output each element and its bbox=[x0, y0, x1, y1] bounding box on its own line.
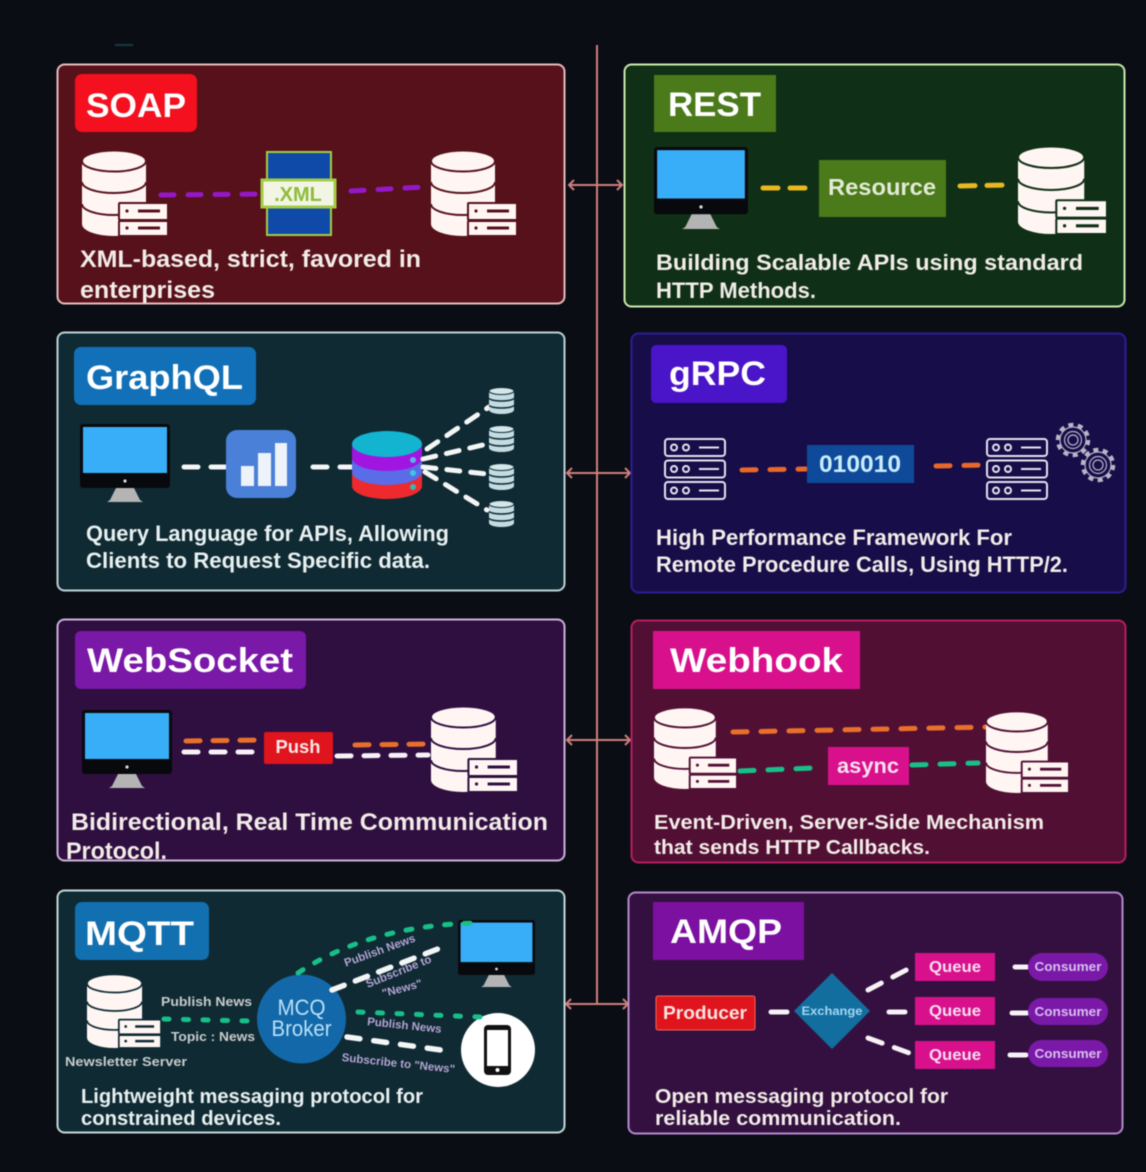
icon: gears bbox=[1058, 425, 1113, 480]
description: WebSocket: Bidirectional, Real Time Communication bbox=[71, 809, 548, 836]
icon: left server bbox=[665, 439, 725, 499]
rotated link labels: Publish News bbox=[367, 1016, 442, 1036]
icon: left database bbox=[654, 707, 737, 789]
description: REST: HTTP Methods. bbox=[656, 278, 816, 303]
icon: newsletter server database bbox=[87, 974, 161, 1048]
binary payload box: 010010 bbox=[819, 451, 901, 478]
description: gRPC: Remote Procedure Calls, Using HTTP/2. bbox=[656, 552, 1068, 577]
rotated link labels: Publish News bbox=[343, 933, 417, 970]
dashed link: left bbox=[161, 194, 262, 195]
dashed link: subscribe from phone bbox=[347, 1037, 448, 1051]
description: SOAP: enterprises bbox=[80, 277, 215, 304]
icon: small databases bbox=[489, 388, 514, 527]
queue boxes bbox=[915, 953, 995, 1069]
dashed link: green left bbox=[740, 768, 813, 771]
panel: gRPC bbox=[632, 334, 1126, 592]
panel: WebSocket bbox=[58, 620, 564, 865]
async box bbox=[828, 747, 909, 785]
description: GraphQL: Query Language for APIs, Allowing bbox=[86, 521, 449, 546]
arrow: GraphQL to gRPC bbox=[567, 468, 630, 478]
binary payload box bbox=[807, 445, 914, 483]
queue boxes: Queue bbox=[929, 959, 981, 976]
panel: SOAP bbox=[58, 64, 564, 304]
description: MQTT: Lightweight messaging protocol for bbox=[81, 1086, 423, 1108]
arrow: WebSocket to Webhook bbox=[567, 735, 630, 745]
description: MQTT bbox=[81, 1086, 423, 1130]
icon: monitor bbox=[654, 147, 748, 229]
description: REST bbox=[656, 250, 1083, 303]
rotated link labels: Subscribe to bbox=[364, 954, 433, 991]
dashed link: producer to exchange bbox=[771, 1010, 787, 1014]
heading: SOAP bbox=[75, 74, 197, 132]
icon: XML document bbox=[262, 152, 335, 235]
heading: MQTT bbox=[75, 902, 209, 960]
push box bbox=[264, 732, 333, 764]
broker circle: MCQ bbox=[278, 995, 326, 1020]
heading: gRPC: gRPC bbox=[669, 355, 766, 393]
async box: async bbox=[837, 755, 899, 778]
dashed link: publish to phone bbox=[358, 1012, 480, 1017]
icon: XML document: .XML bbox=[274, 184, 322, 206]
queue boxes: Queue bbox=[929, 1047, 981, 1064]
heading: MQTT: MQTT bbox=[85, 915, 194, 953]
dashed link: right bbox=[351, 187, 424, 191]
icon: monitor bbox=[82, 710, 172, 788]
icon: phone bbox=[461, 1013, 535, 1087]
resource box bbox=[819, 160, 946, 217]
resource box: Resource bbox=[828, 174, 936, 200]
description: AMQP: Open messaging protocol for bbox=[655, 1086, 948, 1108]
rotated link labels: Subscribe to "News" bbox=[341, 1052, 456, 1076]
arrow: SOAP to REST bbox=[569, 180, 622, 190]
heading: REST: REST bbox=[668, 86, 761, 124]
panel: AMQP bbox=[628, 892, 1122, 1134]
dashed links: right bbox=[337, 744, 428, 756]
description: Webhook: Event-Driven, Server-Side Mechanism bbox=[654, 811, 1044, 834]
rotated link labels: "News" bbox=[381, 978, 424, 1000]
description: GraphQL bbox=[86, 521, 449, 573]
icon: database bbox=[431, 706, 518, 792]
push box: Push bbox=[276, 737, 320, 757]
small teal mark at top bbox=[115, 44, 133, 46]
dashed link: right bbox=[960, 185, 1005, 186]
heading: Webhook bbox=[653, 631, 860, 689]
icon: layered database bbox=[352, 431, 422, 499]
description: MQTT: constrained devices. bbox=[81, 1108, 281, 1130]
dashed links: left bbox=[184, 740, 262, 752]
heading: AMQP: AMQP bbox=[670, 913, 782, 951]
heading: WebSocket: WebSocket bbox=[87, 642, 293, 680]
heading: REST bbox=[654, 75, 776, 132]
dashed link: chart to stack bbox=[313, 464, 355, 470]
dashed link: orange callback bbox=[733, 727, 988, 732]
panel: MQTT bbox=[58, 890, 564, 1132]
dashed link: publish to monitor bbox=[298, 923, 478, 973]
dashed link: green right bbox=[912, 763, 978, 765]
labels: server side: Newsletter Server bbox=[65, 1054, 187, 1069]
panel: Webhook bbox=[632, 620, 1126, 862]
icon: right database bbox=[986, 711, 1069, 793]
panel: GraphQL bbox=[58, 332, 564, 590]
dashed link: right bbox=[936, 465, 982, 466]
panel: REST bbox=[624, 64, 1124, 306]
producer box bbox=[656, 996, 755, 1030]
description: GraphQL: Clients to Request Specific data. bbox=[86, 548, 430, 573]
description: gRPC: High Performance Framework For bbox=[656, 525, 1012, 550]
heading: WebSocket bbox=[75, 631, 306, 689]
queue boxes: Queue bbox=[929, 1003, 981, 1020]
arrow: MQTT to AMQP bbox=[566, 999, 628, 1009]
heading: GraphQL bbox=[74, 347, 256, 405]
dashed link: server to broker bbox=[164, 1019, 250, 1021]
rotated link labels bbox=[341, 933, 456, 1076]
dashed link: client to chart bbox=[184, 464, 226, 470]
icon: left database bbox=[82, 150, 168, 236]
description: AMQP bbox=[655, 1086, 948, 1130]
dashed links: queues to consumers bbox=[1010, 967, 1027, 1055]
consumer pills: Consumer bbox=[1034, 1005, 1102, 1019]
description: WebSocket: Protocol. bbox=[66, 838, 167, 865]
consumer pills: Consumer bbox=[1034, 960, 1102, 974]
icon: right database bbox=[431, 150, 517, 236]
exchange diamond: Exchange bbox=[802, 1004, 863, 1018]
description: REST: Building Scalable APIs using standard bbox=[656, 250, 1083, 275]
description: SOAP bbox=[80, 246, 421, 304]
dashed link: subscribe from monitor bbox=[332, 945, 448, 990]
dashed link: left bbox=[742, 469, 806, 470]
central vertical connector line bbox=[596, 45, 598, 1005]
description: AMQP: reliable communication. bbox=[655, 1108, 901, 1130]
icon: right server bbox=[987, 439, 1047, 499]
description: Webhook bbox=[654, 811, 1044, 859]
description: gRPC bbox=[656, 525, 1068, 577]
icon: monitor bbox=[458, 920, 535, 987]
exchange diamond bbox=[794, 973, 870, 1049]
consumer pills: Consumer bbox=[1034, 1047, 1102, 1061]
heading: GraphQL: GraphQL bbox=[86, 359, 243, 397]
labels: server side: Topic : News bbox=[171, 1029, 255, 1044]
dashed link: left bbox=[763, 186, 808, 190]
broker circle: Broker bbox=[272, 1016, 332, 1041]
labels: server side bbox=[65, 994, 255, 1069]
heading: Webhook: Webhook bbox=[670, 642, 843, 680]
icon: GraphQL chart bbox=[226, 430, 296, 498]
dashed links: exchange to queues bbox=[868, 968, 912, 1054]
icon: database bbox=[1018, 147, 1107, 234]
heading: AMQP bbox=[653, 902, 804, 960]
consumer pills bbox=[1028, 953, 1108, 1067]
icon: monitor bbox=[80, 424, 170, 502]
dashed links: fan out bbox=[423, 407, 489, 510]
heading: gRPC bbox=[651, 345, 787, 403]
description: Webhook: that sends HTTP Callbacks. bbox=[654, 836, 930, 859]
broker circle bbox=[257, 974, 346, 1064]
labels: server side: Publish News bbox=[161, 994, 252, 1009]
heading: SOAP: SOAP bbox=[86, 87, 186, 125]
producer box: Producer bbox=[663, 1003, 747, 1023]
description: SOAP: XML-based, strict, favored in bbox=[80, 246, 421, 273]
description: WebSocket bbox=[66, 809, 548, 865]
